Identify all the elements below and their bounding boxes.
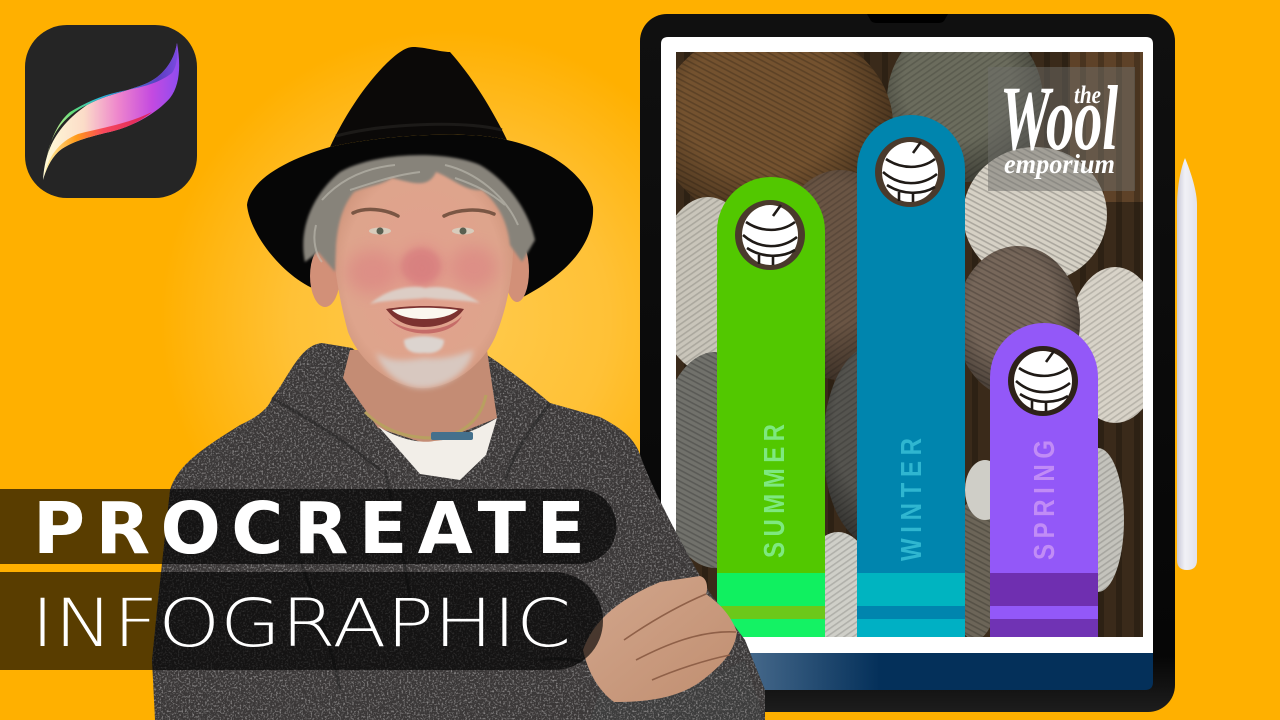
lower lip xyxy=(388,316,462,334)
winter label: WINTER xyxy=(895,438,928,561)
hoodie folds xyxy=(272,398,700,720)
goatee xyxy=(404,336,444,353)
hat brim xyxy=(247,135,593,297)
nose xyxy=(401,248,441,284)
yarn photo xyxy=(676,52,1143,637)
logo word: Wool: Wool xyxy=(1000,67,1118,169)
cheek flush xyxy=(346,246,498,294)
neck xyxy=(343,350,497,445)
spring label: SPRING xyxy=(1028,440,1061,560)
summer label: SUMMER xyxy=(758,424,791,558)
logo: the wool emporium xyxy=(1000,67,1118,179)
eyes xyxy=(369,228,474,234)
infographic backing bar xyxy=(0,572,603,670)
tablet camera notch xyxy=(867,14,948,23)
moustache xyxy=(370,287,480,304)
hand xyxy=(583,576,737,702)
t-shirt collar xyxy=(378,418,497,480)
spring bar stripes xyxy=(990,573,1098,637)
hat crown xyxy=(330,47,507,147)
logo word: the: the xyxy=(1074,82,1101,109)
title banners xyxy=(0,487,616,670)
white screen frame xyxy=(661,37,1153,653)
summer bar stripes xyxy=(717,573,825,637)
tablet bezel xyxy=(640,14,1175,712)
necklace xyxy=(365,395,486,438)
winter bar stripes xyxy=(857,573,965,637)
procreate text: PROCREATE xyxy=(33,487,585,570)
forearm sleeve xyxy=(590,660,765,720)
logo backdrop xyxy=(988,67,1135,191)
presenter portrait xyxy=(152,47,765,720)
procreate backing bar xyxy=(0,489,616,564)
hair xyxy=(303,155,535,272)
bar: winter xyxy=(857,115,965,637)
left ear xyxy=(310,245,340,307)
wood background xyxy=(676,52,1143,637)
navy strip xyxy=(661,640,1153,690)
summer yarn ball icon xyxy=(735,200,805,270)
infographic text: INFOGRAPHIC xyxy=(31,585,571,662)
tablet xyxy=(640,14,1175,712)
eyebrows xyxy=(353,209,494,216)
necklace beads xyxy=(431,432,473,440)
spring yarn ball icon xyxy=(1008,346,1078,416)
banner: procreate xyxy=(0,487,616,570)
summer bar body xyxy=(717,177,825,637)
banner: infographic xyxy=(0,572,603,670)
mouth xyxy=(386,306,464,327)
bar: summer xyxy=(717,177,825,637)
teeth xyxy=(392,308,458,319)
finger creases xyxy=(624,594,736,680)
hoodie xyxy=(152,343,765,720)
chin beard xyxy=(376,350,473,388)
spring bar body xyxy=(990,323,1098,637)
face xyxy=(333,160,513,388)
hair highlights xyxy=(314,165,518,262)
bar: spring xyxy=(990,323,1098,637)
logo word: emporium: emporium xyxy=(1004,149,1115,179)
icon: procreate app xyxy=(25,25,197,198)
apple pencil xyxy=(1177,158,1197,570)
yarn skeins xyxy=(676,52,1143,637)
hat band xyxy=(336,124,502,136)
winter bar body xyxy=(857,115,965,637)
winter yarn ball icon xyxy=(875,137,945,207)
right ear xyxy=(505,240,529,302)
